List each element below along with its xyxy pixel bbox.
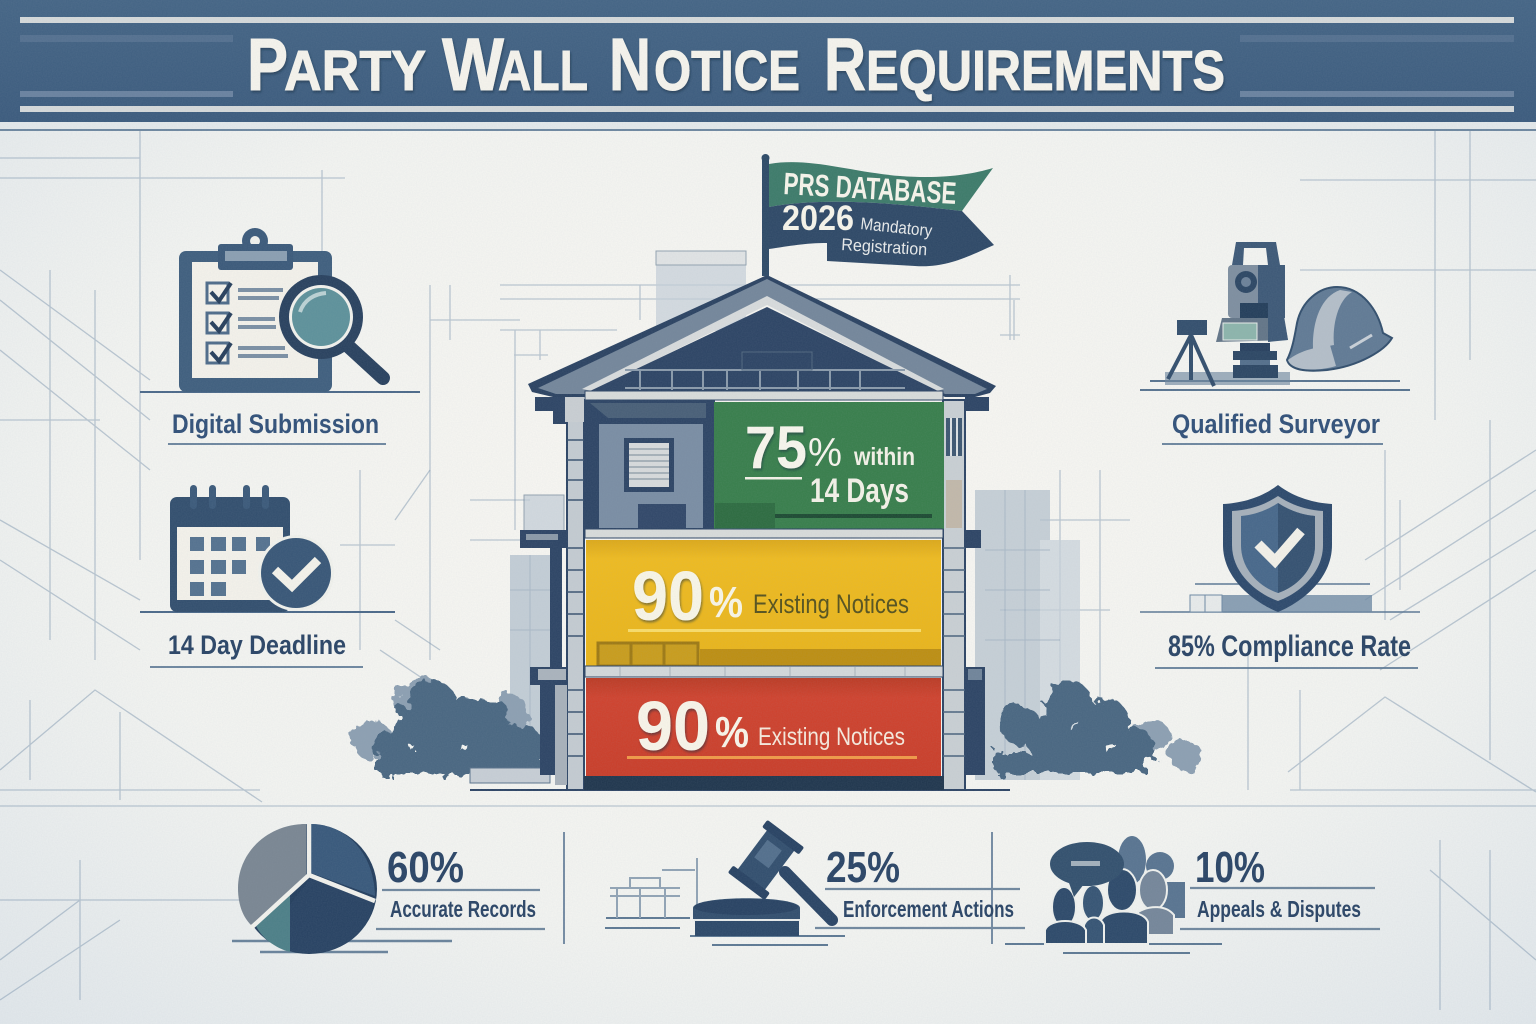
top banner <box>0 0 1536 131</box>
flag dark band <box>769 202 994 266</box>
pale city block left <box>510 495 564 760</box>
flag text: 2026 <box>782 199 854 238</box>
text: 10% appeals and disputes: 10% <box>1195 843 1265 892</box>
left feature: digital submission <box>140 228 420 444</box>
label: 14 day deadline: 14 Day Deadline <box>168 630 346 660</box>
ground line <box>470 789 1010 791</box>
stone step <box>470 768 550 783</box>
panel: yellow 90% existing notices: Existing Notices <box>753 589 909 619</box>
icon: gavel with courthouse sketch <box>605 820 845 945</box>
flag text: Registration <box>841 235 928 259</box>
title <box>247 23 1225 106</box>
bushes left <box>352 676 550 783</box>
title: ARTY <box>284 39 426 103</box>
left column <box>555 392 584 790</box>
text: 60% accurate records: 60% <box>387 843 464 892</box>
title: OTICE <box>654 39 800 103</box>
label: 85% compliance rate: 85% Compliance Rate <box>1168 630 1411 663</box>
panel: red 90% existing notices <box>586 678 941 776</box>
panel: red 90% existing notices: Existing Notices <box>758 723 905 751</box>
panel: yellow 90% existing notices: % <box>709 578 743 627</box>
left feature: 14 day deadline <box>140 485 395 667</box>
side ledges and dark walls <box>520 397 989 775</box>
icon: clipboard with magnifier <box>140 228 420 392</box>
title: N <box>609 23 651 106</box>
flag green band <box>769 162 993 211</box>
stat: enforcement actions: Enforcement Actions <box>843 896 1014 922</box>
panel: green 75% within 14 days: 75 <box>745 414 807 481</box>
right column <box>943 400 965 790</box>
panel: green 75% within 14 days <box>714 402 944 529</box>
title: W <box>442 23 504 106</box>
title: EQUIREMENTS <box>866 39 1225 103</box>
right feature: qualified surveyor <box>1140 242 1410 444</box>
icon: shield with check <box>1140 485 1420 612</box>
flag text: PRS DATABASE <box>783 166 957 211</box>
flag <box>762 154 994 276</box>
section dividers <box>564 832 992 944</box>
flag text: Mandatory <box>860 214 934 241</box>
stat: enforcement actions <box>605 820 1025 945</box>
panel: green 75% within 14 days: % <box>808 431 842 475</box>
lower beam 2 <box>585 666 943 677</box>
pale building behind roof <box>656 251 746 331</box>
panel: green 75% within 14 days: 14 Days <box>810 472 909 510</box>
panel: yellow 90% existing notices <box>586 540 941 666</box>
text: 25% enforcement actions: 25% <box>826 843 900 892</box>
icon: pie chart <box>232 824 452 954</box>
title: R <box>824 23 866 106</box>
stat: accurate records <box>232 824 545 954</box>
left room <box>585 400 715 530</box>
background buildings <box>510 251 1080 780</box>
panel: red 90% existing notices: % <box>715 708 749 757</box>
title: ALL <box>498 39 588 103</box>
lower beam 1 <box>585 529 943 538</box>
label: digital submission: Digital Submission <box>172 409 379 439</box>
stat: appeals and disputes <box>1005 836 1380 953</box>
flag text <box>782 166 957 259</box>
label: qualified surveyor: Qualified Surveyor <box>1172 409 1380 439</box>
stat: accurate records: Accurate Records <box>390 896 536 922</box>
title: P <box>247 23 288 106</box>
right feature: compliance rate <box>1140 485 1420 668</box>
roof <box>528 275 996 397</box>
panel: red 90% existing notices: 90 <box>636 687 710 765</box>
foundation <box>584 776 944 790</box>
icon: calendar with check <box>140 485 395 612</box>
flag pole <box>762 154 770 276</box>
pale city block right <box>975 490 1080 780</box>
panel: green 75% within 14 days: within <box>853 443 915 471</box>
icon: people with speech bubble <box>1005 836 1222 953</box>
upper beam <box>585 391 943 400</box>
stat: appeals and disputes: Appeals & Disputes <box>1197 896 1361 922</box>
icon: total station, tripod and hard hat <box>1140 242 1410 390</box>
panel: yellow 90% existing notices: 90 <box>632 557 704 635</box>
house <box>520 275 996 790</box>
gable <box>590 307 938 391</box>
bushes right <box>996 680 1201 774</box>
